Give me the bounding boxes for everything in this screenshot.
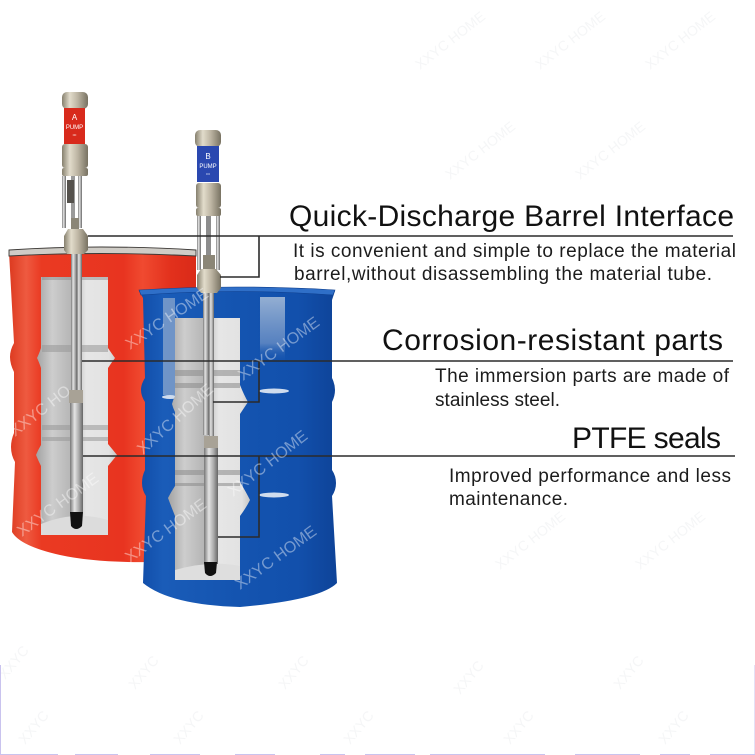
faint background watermarks: XXYC — [340, 707, 377, 747]
pump A material tube — [69, 250, 83, 512]
description: barrel,without disassembling the material tube. — [294, 264, 712, 285]
red barrel cutaway — [36, 277, 117, 535]
faint background watermarks: XXYC HOME — [532, 8, 608, 72]
description — [293, 241, 736, 285]
pump B black tip — [204, 562, 217, 576]
pump B material tube — [203, 290, 218, 564]
callout: quick-discharge barrel interface — [289, 200, 736, 285]
heading: Quick-Discharge Barrel Interface — [289, 200, 734, 233]
pump B blue label: B — [205, 152, 211, 161]
watermarks: XXYC HOME — [123, 286, 212, 353]
leader lines — [82, 236, 735, 537]
faint background watermarks: XXYC HOME — [442, 118, 518, 182]
pump A red label — [64, 108, 85, 144]
pump A head cap — [62, 92, 88, 109]
pump B rods — [197, 215, 220, 270]
pump A red label: A — [72, 113, 78, 122]
faint background watermarks: XXYC — [275, 652, 312, 692]
faint background watermarks: XXYC — [125, 652, 162, 692]
pump B blue label: PUMP — [199, 164, 217, 170]
description: It is convenient and simple to replace the material — [293, 241, 736, 262]
pump B blue label: ••• — [206, 172, 211, 176]
heading: Corrosion-resistant parts — [382, 324, 723, 357]
description: stainless steel. — [435, 390, 560, 411]
pump B head cap — [195, 130, 221, 147]
pump A collar — [62, 144, 88, 168]
watermarks: XXYC HOME — [235, 314, 323, 384]
callout: PTFE seals — [449, 422, 731, 510]
pump B blue label — [197, 146, 219, 182]
bottom edge artifact — [0, 665, 755, 755]
watermarks: XXYC HO — [7, 382, 74, 440]
description — [449, 466, 731, 510]
watermarks: XXYC HOME — [122, 496, 210, 566]
watermarks: XXYC HOME — [225, 428, 311, 500]
faint background watermarks: XXYC — [450, 657, 487, 697]
description: The immersion parts are made of — [435, 366, 730, 387]
faint background watermarks: XXYC HOME — [492, 508, 568, 572]
pump A rods — [62, 176, 82, 230]
pump A red label: ••• — [73, 133, 77, 137]
faint background watermarks: XXYC HOME — [412, 8, 488, 72]
description — [435, 366, 730, 411]
faint background watermarks: XXYC HOME — [642, 8, 718, 72]
watermarks: XXYC HOME — [14, 470, 102, 540]
faint background watermarks: XXYC — [170, 707, 207, 747]
watermarks: XXYC HOME — [232, 523, 320, 593]
pump A red label: PUMP — [66, 125, 83, 131]
faint background watermarks: XXYC — [500, 707, 537, 747]
faint background watermarks: XXYC HOME — [572, 118, 648, 182]
faint background watermarks: XXYC HOME — [632, 508, 708, 572]
callout: corrosion-resistant parts — [382, 324, 730, 411]
pump B — [195, 130, 221, 576]
faint background watermarks: XXYC — [655, 707, 692, 747]
faint background watermarks: XXYC — [15, 707, 52, 747]
blue barrel — [139, 287, 337, 607]
description: Improved performance and less — [449, 466, 731, 487]
heading: PTFE seals — [572, 422, 721, 455]
pump B quick-discharge block — [197, 269, 221, 293]
red barrel — [9, 247, 200, 562]
pump A black tip — [70, 512, 83, 529]
watermarks: XXYC HOME — [134, 381, 217, 458]
faint background watermarks: XXYC — [610, 652, 647, 692]
description: maintenance. — [449, 489, 568, 510]
pump A — [62, 92, 88, 529]
pump B collar — [196, 183, 221, 208]
blue barrel cutaway — [168, 318, 250, 580]
pump A quick-discharge block — [64, 229, 88, 254]
watermarks — [7, 286, 323, 593]
